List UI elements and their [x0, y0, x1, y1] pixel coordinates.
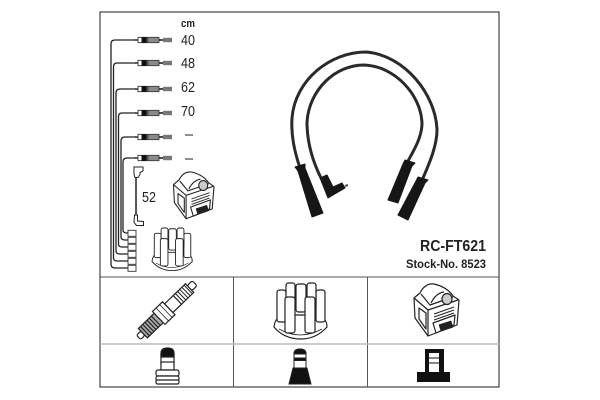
- icon: tapered boot: [289, 349, 311, 384]
- icon: ignition coil: [414, 284, 459, 336]
- icon: coil boot: [417, 349, 450, 382]
- ignition cable photo: [292, 52, 437, 178]
- cable lengths: [142, 33, 195, 206]
- small ignition coil: [174, 172, 214, 219]
- cable lengths: –: [185, 151, 194, 167]
- outer cable: [292, 52, 437, 178]
- cable length unit: cm: [181, 18, 195, 30]
- icon: straight boot: [156, 348, 179, 384]
- coil wire: [134, 167, 144, 226]
- icon: spark plug: [132, 277, 201, 344]
- inner cable: [307, 65, 422, 178]
- cable lengths: –: [185, 127, 194, 143]
- cable lengths: 40: [181, 33, 195, 49]
- wire routing schematic: [111, 40, 136, 268]
- wire terminals: [128, 230, 136, 271]
- cable lengths: 52: [142, 190, 156, 206]
- stock number: Stock-No. 8523: [406, 257, 486, 271]
- outer frame: [100, 12, 499, 387]
- cable lengths: 70: [181, 104, 195, 120]
- wire connectors: [135, 37, 172, 161]
- icon: distributor cap: [274, 283, 327, 339]
- grid dividers: [100, 277, 499, 387]
- product code: RC-FT621: [420, 238, 486, 255]
- small distributor cap: [152, 228, 192, 271]
- cable lengths: 48: [181, 56, 195, 72]
- cable lengths: 62: [181, 80, 195, 96]
- spark plug boots: [295, 160, 428, 220]
